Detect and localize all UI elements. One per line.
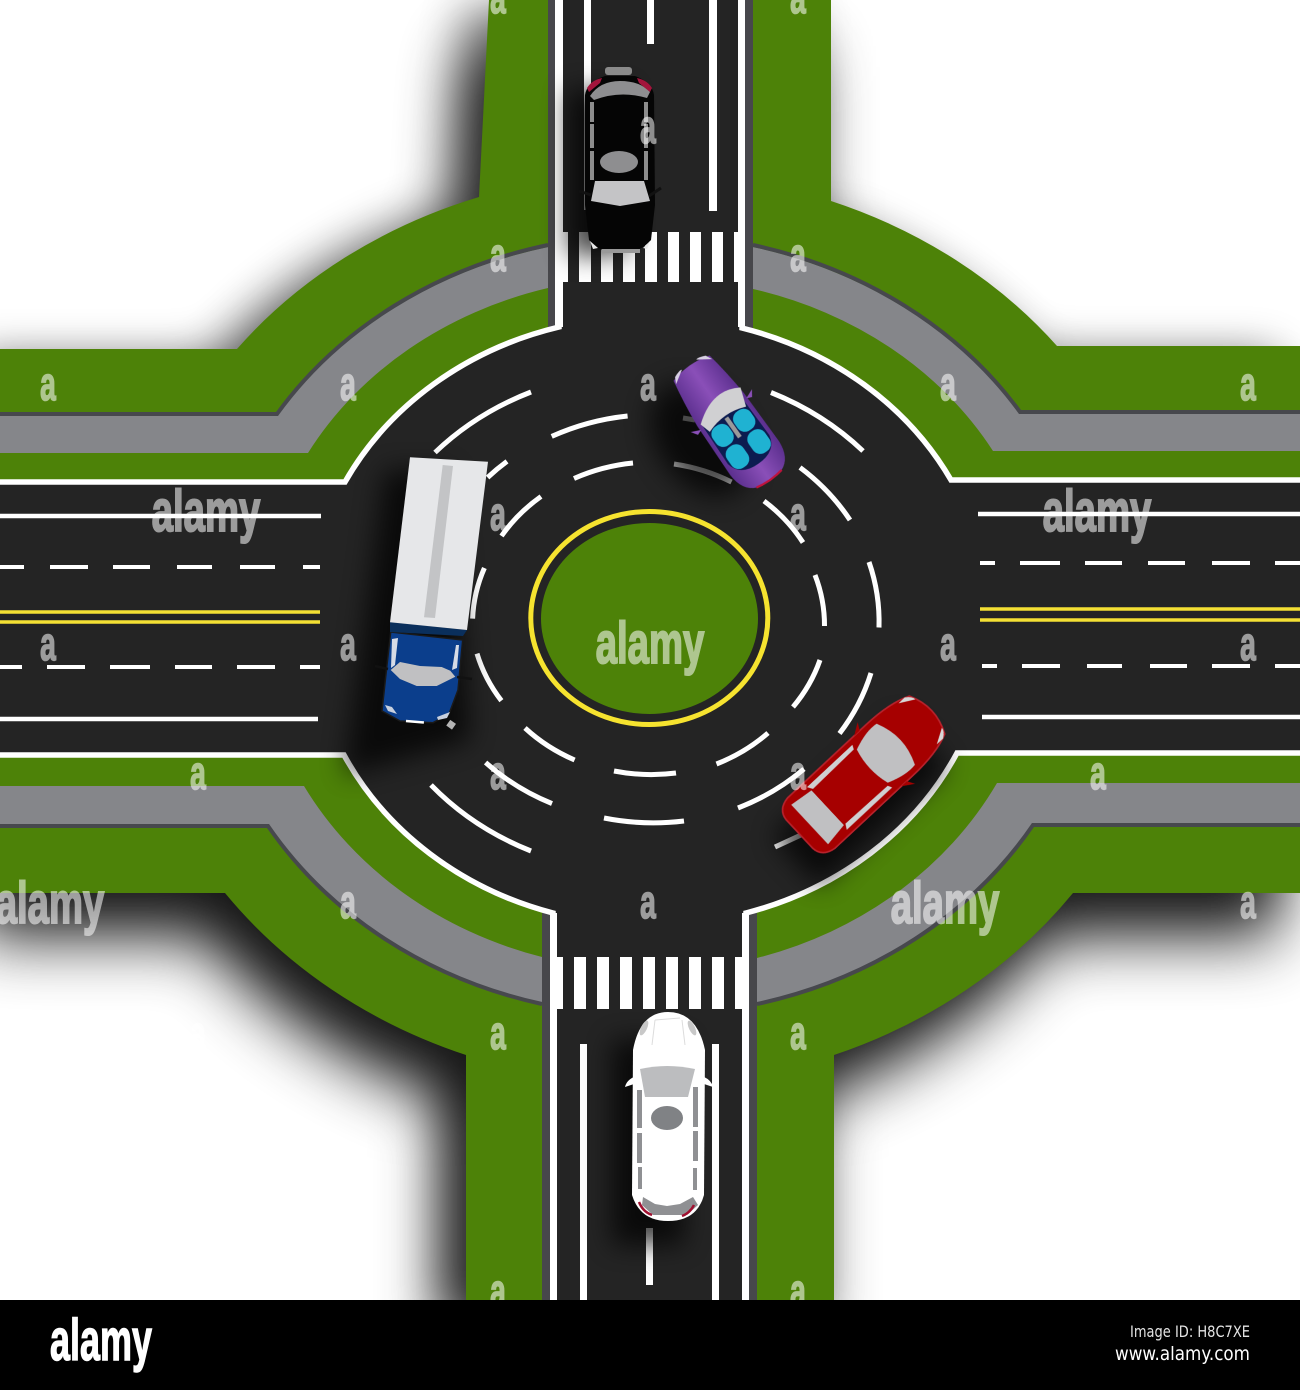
alamy watermark: a xyxy=(640,102,656,154)
alamy watermark: a xyxy=(490,748,506,800)
truck cab xyxy=(375,632,472,730)
right road markings xyxy=(978,514,1300,717)
black car sunroof xyxy=(600,151,638,173)
alamy watermark: a xyxy=(790,1008,806,1060)
black car body xyxy=(585,76,655,253)
truck cargo box xyxy=(390,457,488,630)
white car side windows xyxy=(637,1087,698,1190)
alamy watermark: a xyxy=(1240,359,1256,411)
island grass xyxy=(541,523,758,714)
black car roof rack xyxy=(605,67,632,75)
top crosswalk xyxy=(557,232,745,282)
alamy watermark: a xyxy=(1090,748,1106,800)
alamy watermark: a xyxy=(1090,1008,1106,1060)
alamy watermark: alamy xyxy=(891,872,1000,936)
alamy watermark: a xyxy=(490,489,506,541)
path: top right xyxy=(753,245,1300,451)
headlights xyxy=(898,693,948,744)
alamy watermark: alamy xyxy=(596,612,705,676)
car body xyxy=(665,348,794,497)
alamy watermark: a xyxy=(940,359,956,411)
black car rear window xyxy=(590,81,650,100)
white car sunroof xyxy=(651,1106,683,1130)
white car xyxy=(625,1012,713,1221)
island yellow ring xyxy=(531,512,768,724)
footer logo: alamy xyxy=(50,1308,152,1373)
alamy watermark: a xyxy=(640,877,656,929)
bottom road markings xyxy=(553,957,743,1300)
alamy watermark: a xyxy=(490,1266,506,1318)
website: www.alamy.com xyxy=(1115,1343,1250,1365)
white car rear window xyxy=(642,1197,698,1215)
alamy watermark: a xyxy=(40,359,56,411)
alamy watermark: a xyxy=(190,748,206,800)
alamy watermark: a xyxy=(490,230,506,282)
rear window xyxy=(791,788,846,844)
alamy watermark: a xyxy=(790,748,806,800)
white car body xyxy=(632,1012,705,1221)
central island xyxy=(531,512,768,724)
top road markings xyxy=(557,0,745,282)
side windows xyxy=(807,745,892,830)
vehicle shadows xyxy=(345,90,947,1245)
purple convertible xyxy=(658,343,801,502)
road curbs xyxy=(542,0,757,1300)
alamy watermark: a xyxy=(790,489,806,541)
alamy watermark: a xyxy=(340,877,356,929)
alamy watermark: a xyxy=(40,619,56,671)
alamy watermark: a xyxy=(190,1008,206,1060)
vertical road edge lines xyxy=(550,0,749,1300)
car body xyxy=(776,685,955,859)
alamy watermark: a xyxy=(790,1266,806,1318)
black car xyxy=(579,67,661,253)
path: bottom left xyxy=(0,786,542,1004)
path: bottom right xyxy=(757,783,1300,1004)
alamy watermark: a xyxy=(640,359,656,411)
seats xyxy=(708,405,774,473)
path: top left xyxy=(0,245,548,453)
black car windshield xyxy=(591,181,650,206)
alamy watermark: alamy xyxy=(1043,480,1152,544)
image id: Image ID: H8C7XE xyxy=(1130,1322,1250,1341)
alamy watermark: a xyxy=(1240,619,1256,671)
bottom crosswalk xyxy=(553,957,743,1009)
alamy watermark: a xyxy=(340,619,356,671)
pedestrian paths xyxy=(0,245,1300,1004)
truck coupling xyxy=(390,622,467,636)
alamy watermark: alamy xyxy=(152,480,261,544)
alamy watermark: a xyxy=(1240,877,1256,929)
interior xyxy=(702,398,779,478)
white car mirrors xyxy=(625,1075,713,1087)
footer bar xyxy=(0,1300,1300,1390)
windshield xyxy=(850,719,920,789)
truck xyxy=(375,457,488,730)
alamy watermark: a xyxy=(790,230,806,282)
alamy watermark: a xyxy=(340,359,356,411)
alamy watermark: a xyxy=(940,619,956,671)
windshield xyxy=(692,384,752,434)
black car side windows xyxy=(590,102,648,180)
red sports car xyxy=(771,680,960,865)
left road markings xyxy=(0,516,321,719)
alamy watermark: a xyxy=(490,1008,506,1060)
roundabout lane dashes xyxy=(431,392,879,851)
white car windshield xyxy=(640,1066,695,1097)
